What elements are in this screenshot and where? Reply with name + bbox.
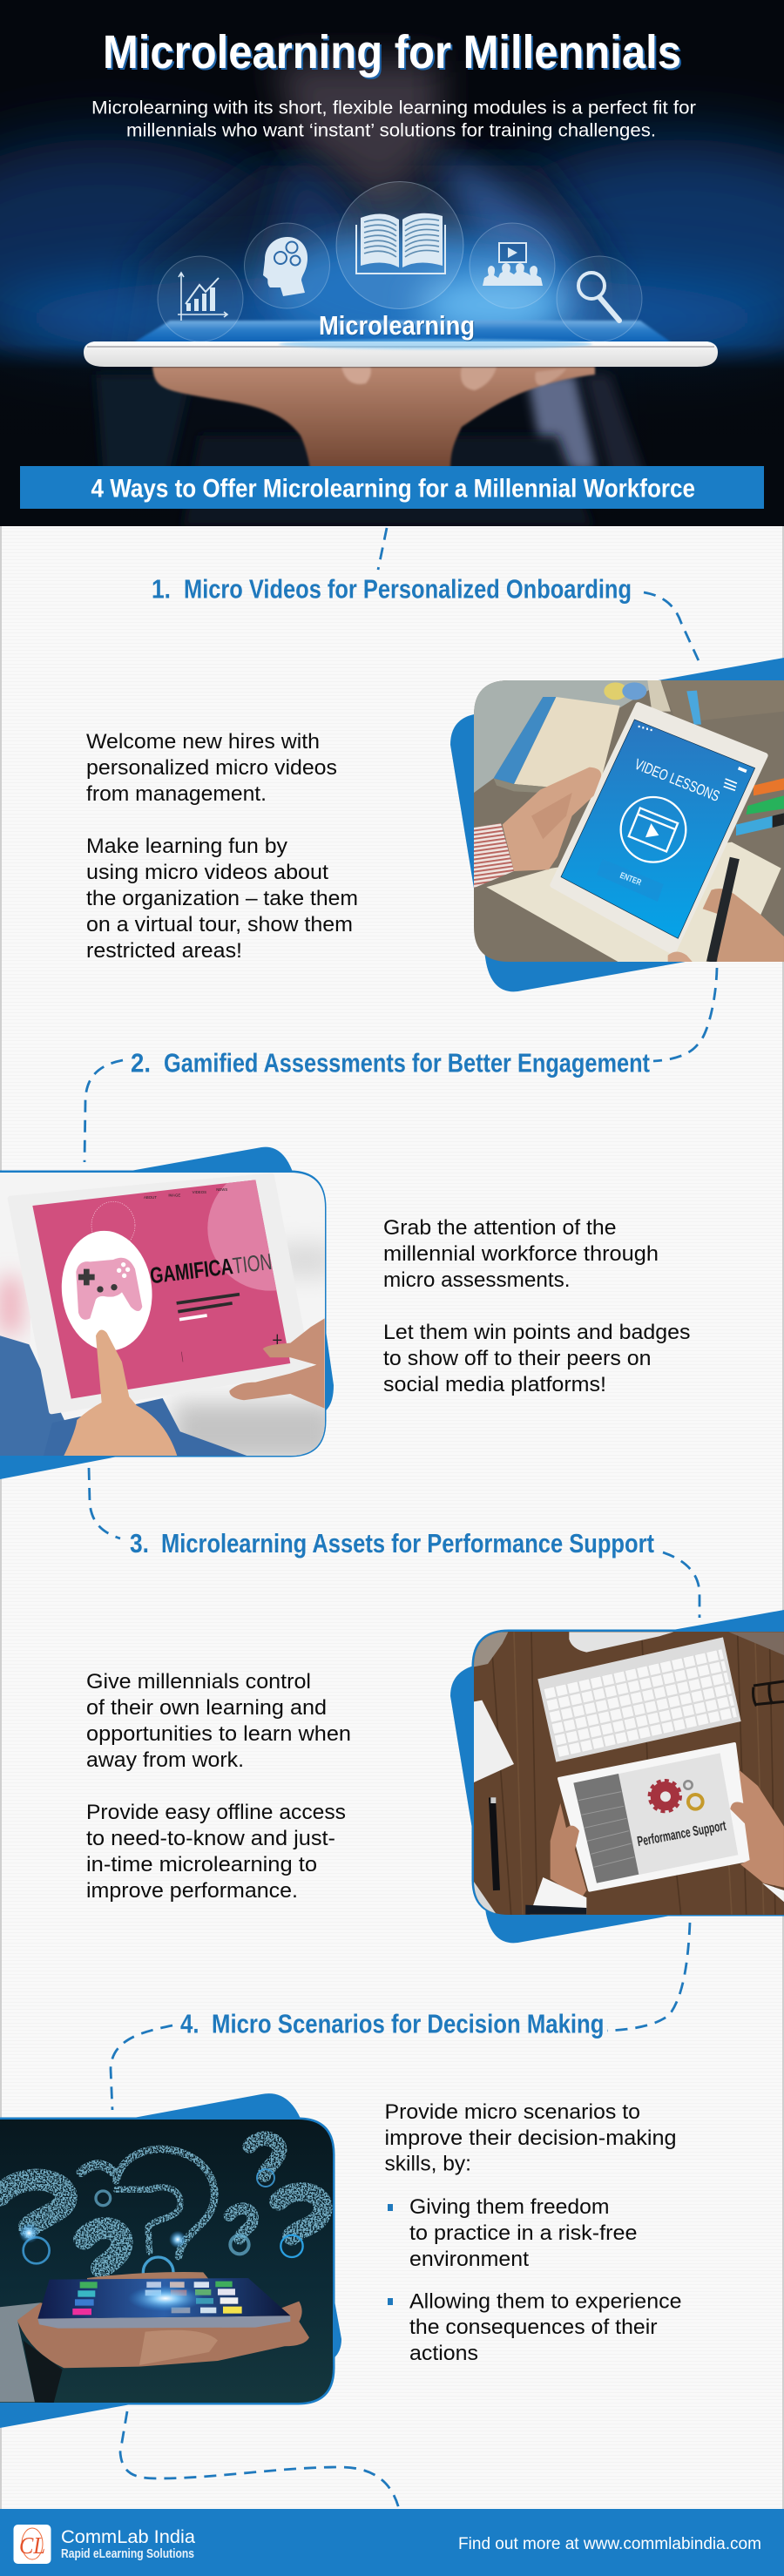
text block 1: Make learning fun by (86, 835, 287, 858)
text block 1 (86, 730, 358, 963)
icon: video audience (470, 223, 555, 308)
icon: head with gears (244, 223, 329, 308)
image panel 2: gamification tablet (0, 1141, 340, 1481)
dashed connector path (84, 528, 717, 2509)
image panel 2: gamification tablet: IMAGE (168, 1193, 180, 1197)
text block 3: to need-to-know and just- (86, 1827, 335, 1850)
text block 4 (385, 2100, 681, 2365)
heading 2: 2. (131, 1047, 151, 1078)
company name: CommLab India (61, 2527, 195, 2547)
text block 2: to show off to their peers on (383, 1347, 652, 1370)
intro text (91, 98, 696, 141)
bullet 1: Giving them freedom (409, 2195, 610, 2219)
text block 2: micro assessments. (383, 1268, 570, 1292)
logo: CommLab India: CL (19, 2532, 45, 2559)
bullet 1: to practice in a risk-free (409, 2221, 638, 2245)
tagline: Rapid eLearning Solutions (61, 2547, 194, 2561)
text block 4: improve their decision-making (385, 2126, 676, 2150)
image panel 3: performance support (444, 1610, 784, 1951)
text block 4: Provide micro scenarios to (385, 2100, 640, 2124)
text block 4: skills, by: (385, 2152, 471, 2176)
text block 1: using micro videos about (86, 861, 328, 884)
heading 4: Micro Scenarios for Decision Making (212, 2009, 605, 2038)
title: Microlearning for Millennials (103, 26, 681, 78)
image panel 1: video lessons tablet (444, 653, 784, 993)
banner: 4 ways (20, 466, 764, 509)
text block 3: of their own learning and (86, 1696, 327, 1720)
heading 2: Gamified Assessments for Better Engagement (164, 1047, 650, 1078)
text block 3: in-time microlearning to (86, 1853, 317, 1876)
footer (0, 2509, 784, 2576)
text block 2: millennial workforce through (383, 1242, 659, 1266)
bullet 1: environment (409, 2248, 529, 2271)
heading 1: 1. (152, 573, 171, 605)
icon: line chart (158, 256, 243, 341)
image panel 4: question marks over phone (0, 2091, 348, 2439)
image panel 2: gamification tablet: GAMIFICA (148, 1253, 234, 1288)
text block 1: Welcome new hires with (86, 730, 320, 754)
text block 3: Give millennials control (86, 1670, 311, 1694)
bullet 2: the consequences of their (409, 2316, 657, 2339)
banner: 4 ways: 4 Ways to Offer Microlearning for a Millennial Workforce (91, 474, 695, 504)
tablet screen (132, 321, 672, 343)
text block 2: Grab the attention of the (383, 1216, 617, 1240)
page background (0, 526, 784, 2576)
text block 2: Let them win points and badges (383, 1321, 690, 1344)
text block 3: opportunities to learn when (86, 1722, 351, 1746)
bullet 2: actions (409, 2342, 478, 2365)
heading 1: Micro Videos for Personalized Onboarding (184, 573, 632, 605)
heading 4: 4. (180, 2009, 199, 2038)
bullet 2 (388, 2289, 681, 2365)
intro text: millennials who want ‘instant’ solutions for training challenges. (126, 120, 656, 141)
icon: open book (336, 181, 463, 308)
hero banner (0, 0, 784, 527)
question mark shapes (0, 2139, 323, 2288)
bullet 2: Allowing them to experience (409, 2289, 681, 2314)
icon: magnifier (557, 256, 642, 341)
hero photo background (0, 0, 784, 527)
text block 3: improve performance. (86, 1879, 298, 1903)
text block 1: the organization – take them (86, 887, 358, 910)
text block 1: on a virtual tour, show them (86, 913, 353, 936)
text block 3: Provide easy offline access (86, 1801, 346, 1824)
image panel 2: gamification tablet: NEWS (216, 1187, 227, 1192)
tablet label: Microlearning (319, 310, 475, 341)
heading 3: Microlearning Assets for Performance Support (161, 1528, 654, 1558)
text block 1: personalized micro videos (86, 756, 337, 780)
intro text: Microlearning with its short, flexible learning modules is a perfect fit for (91, 98, 696, 118)
image panel 1: video lessons tablet: VIDEO LESSONS (632, 755, 722, 805)
heading 3: 3. (130, 1528, 149, 1558)
text block 2: social media platforms! (383, 1373, 606, 1396)
hand holding tablet (152, 367, 595, 470)
image panel 2: gamification tablet: ABOUT (144, 1195, 157, 1200)
text block 2 (383, 1216, 690, 1396)
image panel 3: performance support: Performance Support (636, 1819, 727, 1849)
image panel 2: gamification tablet: VIDEOS (193, 1190, 206, 1194)
website: Find out more at www.commlabindia.com (458, 2535, 761, 2553)
tablet body (84, 339, 718, 367)
image panel 1: video lessons tablet: ENTER (618, 871, 642, 888)
logo: CommLab India (14, 2525, 51, 2564)
text block 1: restricted areas! (86, 939, 242, 963)
text block 3 (86, 1670, 351, 1903)
bullet 1 (388, 2195, 638, 2271)
image panel 2: gamification tablet: TION (231, 1248, 274, 1279)
text block 3: away from work. (86, 1748, 244, 1772)
text block 1: from management. (86, 782, 267, 806)
